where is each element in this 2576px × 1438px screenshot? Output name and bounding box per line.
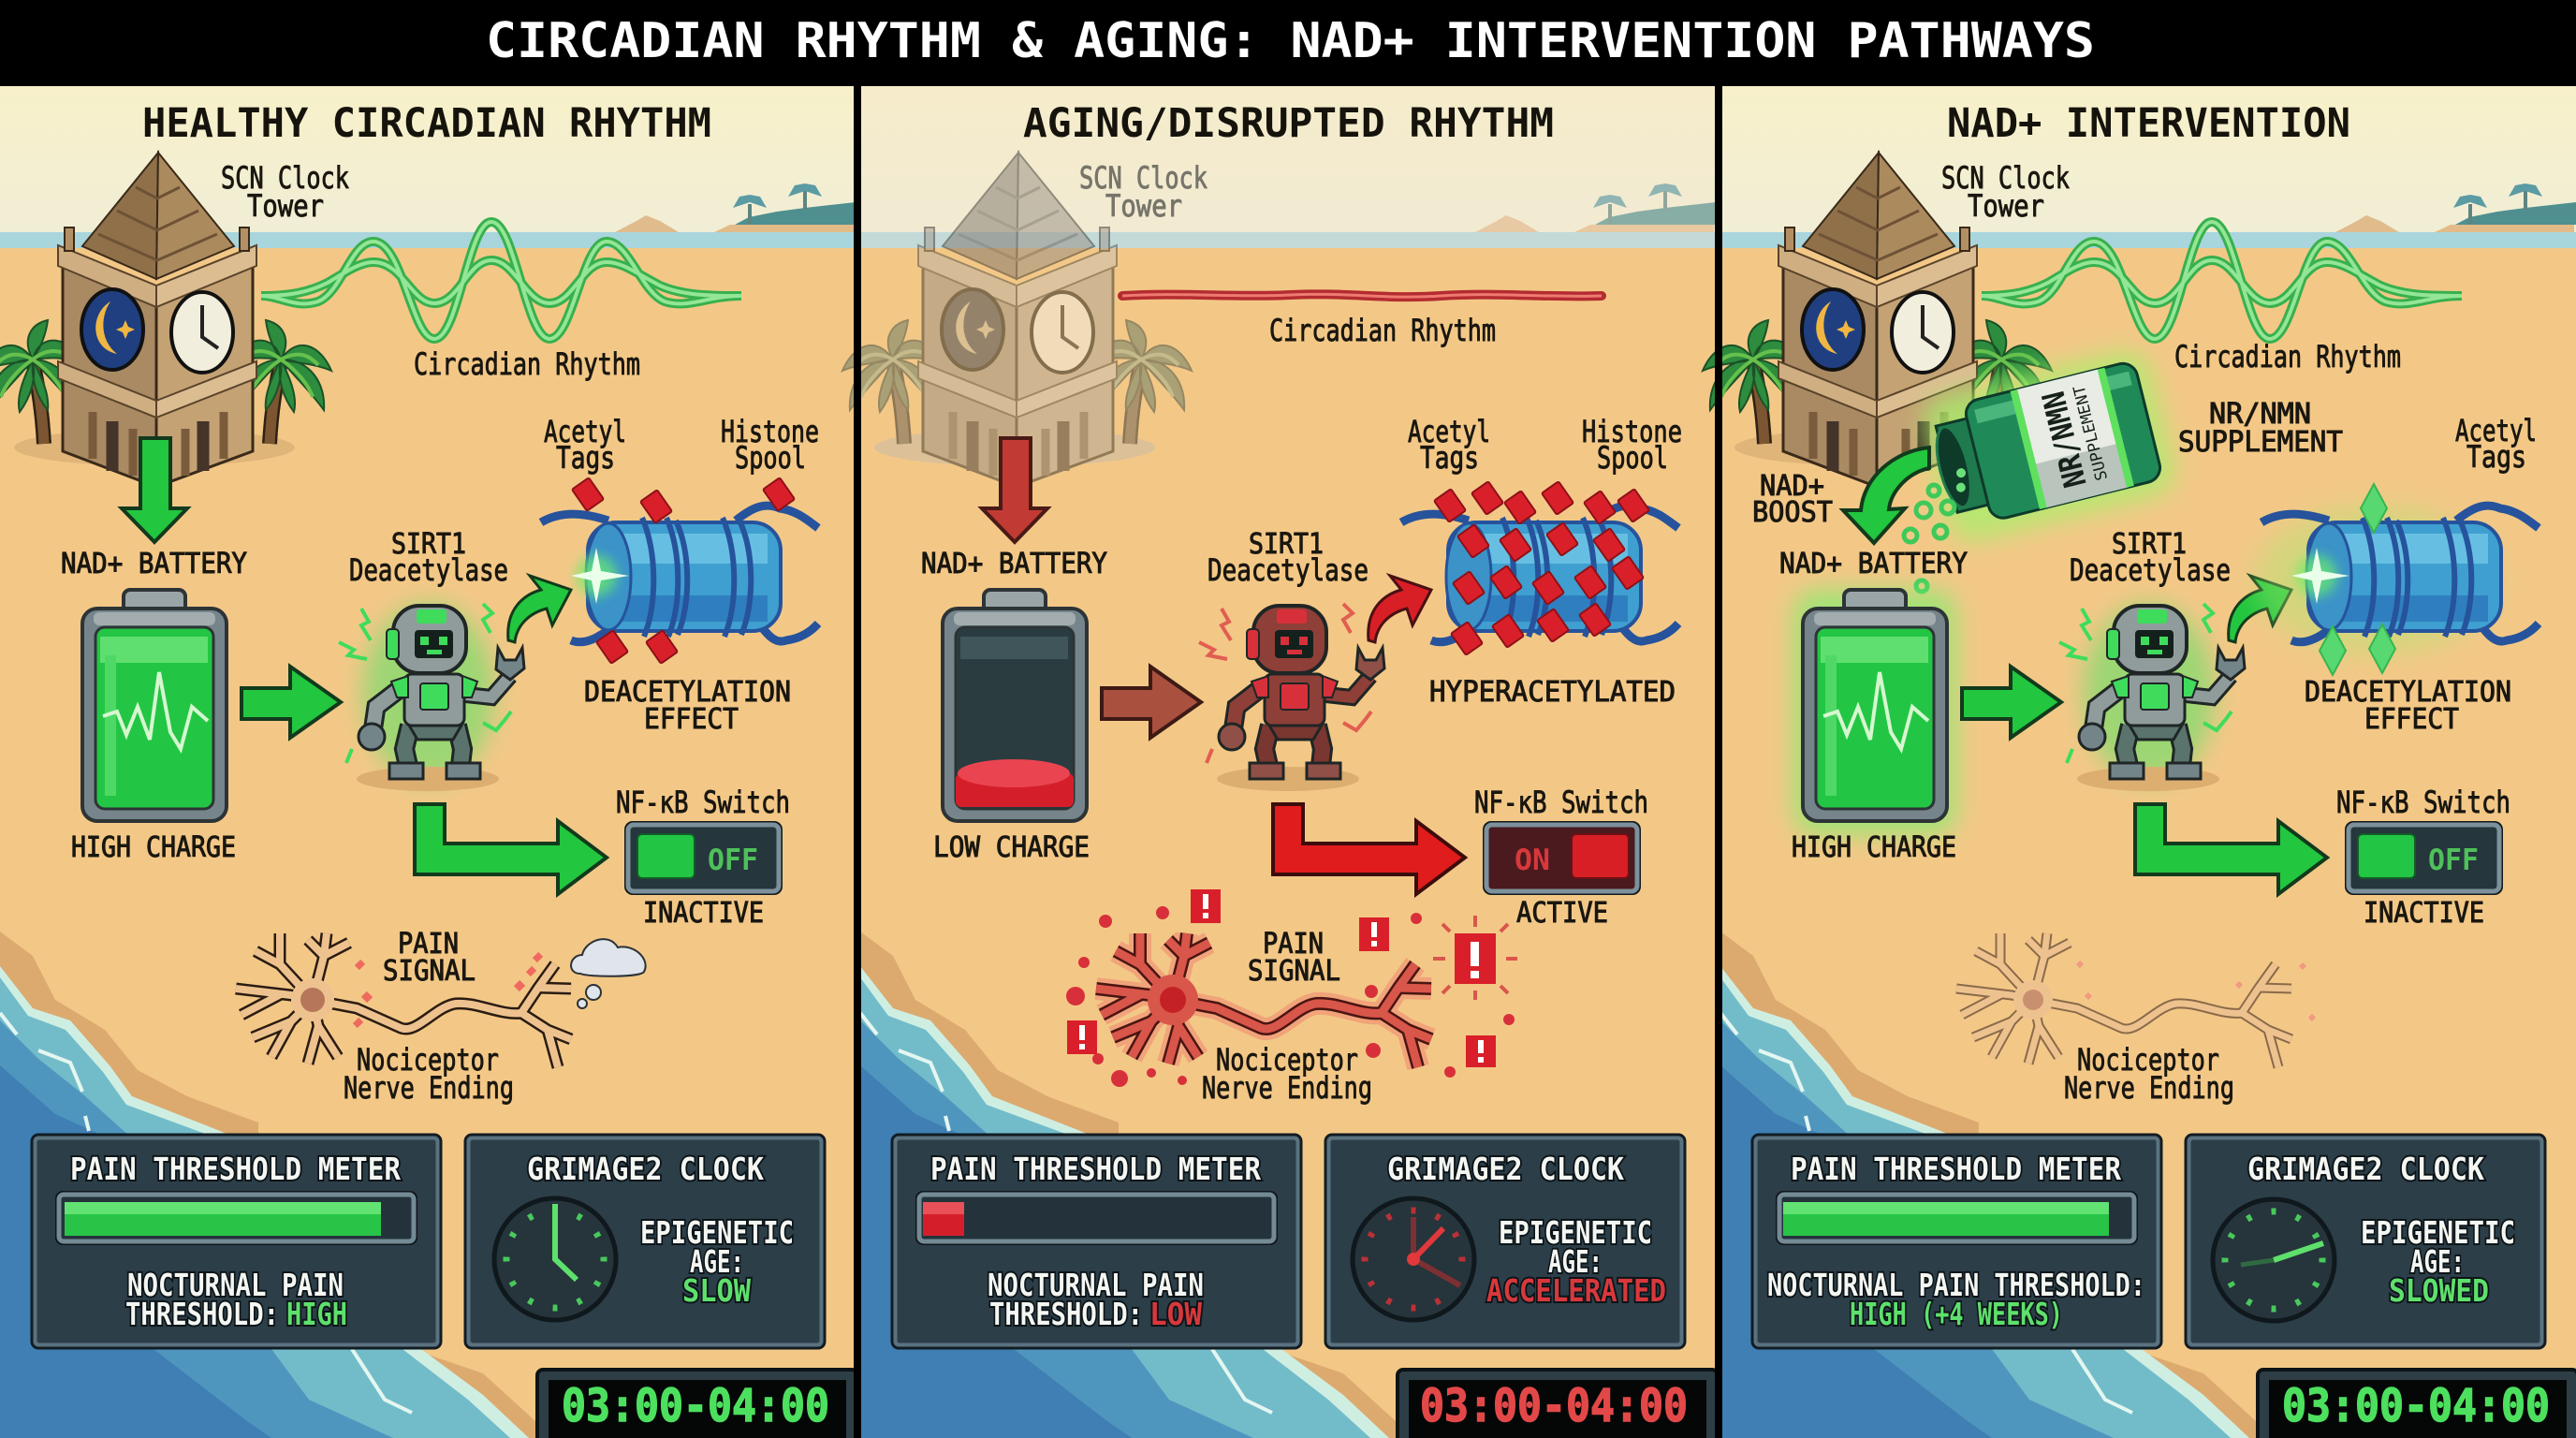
time readout: 03:00-04:00 [2282, 1380, 2550, 1432]
title bar [0, 0, 2576, 86]
icon: red robot [1199, 604, 1384, 791]
icon: nociceptor neuron [236, 933, 571, 1067]
chart: restored circadian wave [1982, 222, 2462, 339]
panel: pain threshold meter: HIGH [286, 1296, 347, 1332]
label: pain signal: PAIN [1263, 928, 1324, 961]
label: NR/NMN supplement [2178, 398, 2343, 459]
label: NAD+ boost: NAD+ [1760, 470, 1824, 503]
panel: pain threshold meter: THRESHOLD: [125, 1296, 279, 1332]
label: deacetylation effect: DEACETYLATION [2305, 676, 2511, 709]
label: acetyl tags: Tags [556, 440, 615, 476]
label: SIRT1 deacetylase [349, 528, 508, 588]
switch: off [2345, 821, 2503, 895]
panel: GrimAge2 clock: AGE: [690, 1243, 744, 1280]
panel: pain threshold meter low [892, 1135, 1685, 1348]
time readout: 03:00-04:00 [562, 1380, 829, 1432]
label: nociceptor nerve ending [344, 1042, 514, 1106]
switch: off: OFF [2428, 844, 2479, 877]
switch: on: ON [1515, 844, 1550, 877]
icon: NAD+ pellets [1904, 485, 1954, 592]
label: active: ACTIVE [1516, 897, 1608, 930]
label: NR/NMN supplement: SUPPLEMENT [2178, 426, 2343, 459]
label: pain signal: SIGNAL [383, 955, 476, 988]
icon: histone spool [541, 477, 818, 664]
label: deacetylation effect: EFFECT [644, 703, 739, 736]
arrow: tower to battery [122, 438, 187, 542]
label: acetyl tags: Tags [1420, 440, 1479, 476]
icon: SCN clock tower [1703, 153, 2052, 487]
label: SCN clock tower: SCN Clock [1941, 160, 2070, 196]
arrow: battery to SIRT1 [242, 667, 341, 738]
icon: hyperacetylated histone [1401, 481, 1678, 655]
label: acetyl tags [2455, 413, 2537, 475]
label: NF-kB switch: NF-κB Switch [1474, 785, 1648, 820]
label: NAD+ battery: NAD+ BATTERY [921, 548, 1107, 580]
time readout red: 03:00-04:00 [1420, 1380, 1688, 1432]
chart: flattened rhythm [1122, 294, 1602, 297]
label: histone spool: Histone [721, 414, 819, 449]
label: deacetylation effect: DEACETYLATION [584, 676, 791, 709]
label: NF-kB switch: NF-κB Switch [616, 785, 790, 820]
label: acetyl tags: Acetyl [1408, 414, 1490, 449]
arrow: battery to SIRT1 [1962, 667, 2061, 738]
label: SIRT1 deacetylase [2070, 528, 2231, 588]
icon: histone spool with released tags [2254, 484, 2539, 675]
icon: glowing full battery [1793, 590, 1956, 835]
icon: empty battery [943, 590, 1087, 821]
label: nociceptor nerve ending: Nociceptor [2077, 1042, 2219, 1078]
label: histone spool: Spool [735, 440, 806, 476]
panel: pain threshold meter: NOCTURNAL PAIN [127, 1267, 344, 1303]
label: SCN clock tower faded: Tower [1105, 188, 1182, 224]
label: acetyl tags: Acetyl [2455, 413, 2537, 448]
label: SCN clock tower: Tower [1968, 188, 2044, 224]
label: SIRT1 deacetylase: SIRT1 [1249, 528, 1324, 561]
panel: pain threshold meter low: THRESHOLD: [989, 1296, 1143, 1332]
label: nociceptor nerve ending [2064, 1042, 2234, 1106]
panel: GrimAge2 clock accelerated: GRIMAGE2 CLOCK [1387, 1151, 1624, 1187]
icon: SIRT1 robot [339, 604, 524, 791]
panel: GrimAge2 clock slowed: EPIGENETIC [2361, 1214, 2515, 1251]
arrow: SIRT1 to NF-kB [2135, 804, 2327, 894]
panel: pain threshold meter low: LOW [1149, 1296, 1202, 1332]
label: nociceptor nerve ending: Nerve Ending [344, 1070, 514, 1106]
label: histone spool: Histone [1582, 414, 1682, 449]
label: acetyl tags [544, 414, 626, 476]
label: nociceptor nerve ending [1202, 1042, 1372, 1106]
heading: NAD+ intervention: NAD+ INTERVENTION [1947, 100, 2350, 147]
label: deacetylation effect: EFFECT [2364, 703, 2459, 736]
panel: GrimAge2 clock slowed: GRIMAGE2 CLOCK [2247, 1151, 2484, 1187]
label: histone spool [1582, 414, 1682, 476]
label: SIRT1 deacetylase: Deacetylase [1208, 552, 1368, 588]
icon: inflamed neuron with alerts [1066, 889, 1517, 1087]
label: NR/NMN supplement: NR/NMN [2209, 398, 2311, 431]
heading: aging: AGING/DISRUPTED RHYTHM [1023, 100, 1554, 147]
arrow: SIRT1 to histone red [1368, 576, 1431, 642]
label: histone spool [721, 414, 819, 476]
icon: SIRT1 robot [2059, 604, 2245, 791]
label: SCN clock tower: SCN Clock [221, 160, 349, 196]
label: nociceptor nerve ending: Nerve Ending [1202, 1070, 1372, 1106]
label: SIRT1 deacetylase: Deacetylase [2070, 552, 2231, 588]
label: acetyl tags: Acetyl [544, 414, 626, 449]
label: inactive: INACTIVE [643, 897, 764, 930]
label: circadian rhythm: Circadian Rhythm [1269, 313, 1496, 348]
label: acetyl tags [1408, 414, 1490, 476]
label: nociceptor nerve ending: Nociceptor [1216, 1042, 1358, 1078]
arrow: SIRT1 to NF-kB [415, 804, 607, 894]
label: pain signal [1248, 928, 1340, 988]
label: SCN clock tower faded [1079, 160, 1208, 224]
icon: NR/NMN supplement bottle: SUPPLEMENT [2071, 383, 2112, 482]
switch: on [1483, 821, 1641, 895]
label: NAD+ battery: NAD+ BATTERY [1779, 548, 1968, 580]
label: SIRT1 deacetylase [1208, 528, 1368, 588]
label: inactive: INACTIVE [2364, 897, 2484, 930]
icon: full battery [82, 590, 227, 821]
panel: GrimAge2 clock accelerated [1353, 1151, 1666, 1320]
switch: off [624, 821, 783, 895]
label: circadian rhythm: Circadian Rhythm [2174, 339, 2401, 374]
label: NF-kB switch: NF-κB Switch [2336, 785, 2510, 820]
panel: pain threshold meter: PAIN THRESHOLD METER [70, 1151, 401, 1187]
panel: pain threshold meter low: NOCTURNAL PAIN [988, 1267, 1204, 1303]
arrow: battery to SIRT1 muted [1102, 667, 1201, 738]
chart: circadian wave [261, 222, 741, 339]
label: high charge: HIGH CHARGE [71, 831, 236, 864]
panel: GrimAge2 clock: EPIGENETIC [640, 1214, 794, 1251]
label: pain signal: SIGNAL [1248, 955, 1340, 988]
label: histone spool: Spool [1597, 440, 1668, 476]
icon: NR/NMN supplement bottle: NR/NMN [2035, 388, 2094, 492]
icon: SCN clock tower [0, 153, 331, 487]
panel: pain threshold meter [32, 1135, 825, 1348]
label: hyperacetylated: HYPERACETYLATED [1429, 676, 1676, 709]
panel: GrimAge2 clock slowed [2213, 1151, 2515, 1321]
label: SIRT1 deacetylase: Deacetylase [349, 552, 508, 588]
panel: healthy circadian rhythm [0, 86, 857, 1438]
label: SIRT1 deacetylase: SIRT1 [2112, 528, 2187, 561]
panel: GrimAge2 clock accelerated: ACCELERATED [1486, 1272, 1666, 1309]
label: SCN clock tower faded: SCN Clock [1079, 160, 1208, 196]
title: CIRCADIAN RHYTHM & AGING: NAD+ INTERVENTION PATHWAYS [486, 13, 2095, 69]
label: NAD+ boost [1752, 470, 1833, 529]
panel: NAD+ intervention [1703, 86, 2576, 1438]
label: low charge: LOW CHARGE [933, 831, 1090, 864]
label: SCN clock tower [221, 160, 349, 224]
heading: healthy: HEALTHY CIRCADIAN RHYTHM [142, 100, 711, 147]
panel: GrimAge2 clock: SLOW [682, 1272, 751, 1309]
arrow: SIRT1 to NF-kB red [1273, 804, 1465, 894]
icon: NR/NMN supplement bottle [1917, 345, 2181, 547]
panel: GrimAge2 clock accelerated: EPIGENETIC [1499, 1214, 1652, 1251]
arrow: NAD+ boost [1843, 448, 1929, 543]
panel: GrimAge2 clock accelerated: AGE: [1548, 1243, 1603, 1280]
panel: aging / disrupted rhythm [842, 86, 1718, 1438]
arrow: SIRT1 to histone [2229, 576, 2291, 642]
label: pain signal [383, 928, 476, 988]
label: nociceptor nerve ending: Nociceptor [357, 1042, 499, 1078]
label: pain signal: PAIN [398, 928, 459, 961]
panel: pain threshold meter restored: NOCTURNAL PAIN THRESHOLD: [1767, 1267, 2145, 1303]
arrow: SIRT1 to histone [508, 576, 571, 642]
panel: pain threshold meter restored [1752, 1135, 2545, 1348]
label: high charge: HIGH CHARGE [1792, 831, 1956, 864]
label: SIRT1 deacetylase: SIRT1 [391, 528, 466, 561]
label: deacetylation effect [2305, 676, 2511, 736]
icon: calm neuron [1956, 933, 2314, 1067]
panel: GrimAge2 clock [494, 1151, 794, 1320]
label: nociceptor nerve ending: Nerve Ending [2064, 1070, 2234, 1106]
icon: thought cloud [571, 939, 646, 1008]
panel: pain threshold meter low: PAIN THRESHOLD METER [930, 1151, 1261, 1187]
panel: GrimAge2 clock slowed: AGE: [2410, 1243, 2465, 1280]
label: circadian rhythm: Circadian Rhythm [414, 346, 640, 382]
panel: GrimAge2 clock slowed: SLOWED [2389, 1272, 2489, 1309]
label: SCN clock tower: Tower [247, 188, 324, 224]
label: NAD+ battery: NAD+ BATTERY [61, 548, 247, 580]
arrow: tower to battery red [982, 438, 1047, 542]
panel: pain threshold meter restored: HIGH (+4 WEEKS) [1850, 1296, 2063, 1332]
panel: pain threshold meter restored: PAIN THRESHOLD METER [1791, 1151, 2121, 1187]
label: SCN clock tower [1941, 160, 2070, 224]
icon: faded clock tower [842, 153, 1192, 487]
label: NAD+ boost: BOOST [1752, 496, 1833, 529]
panel: GrimAge2 clock: GRIMAGE2 CLOCK [527, 1151, 764, 1187]
label: acetyl tags: Tags [2466, 439, 2526, 475]
label: deacetylation effect [584, 676, 791, 736]
switch: off: OFF [708, 844, 758, 877]
